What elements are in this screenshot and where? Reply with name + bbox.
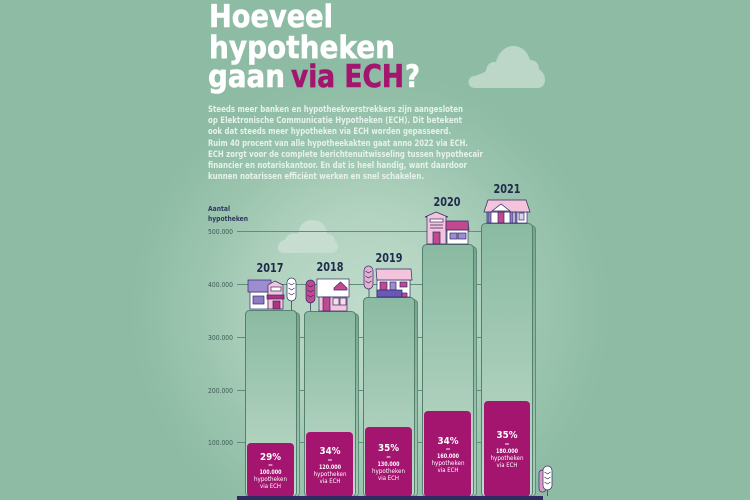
house 2019 (376, 269, 412, 297)
house 2020 (425, 212, 469, 244)
cloud top right (468, 46, 545, 88)
bar 2017 (246, 310, 300, 497)
baseline (237, 496, 543, 500)
bar 2019: 130.000 (378, 461, 400, 468)
title: Hoeveel (209, 0, 333, 35)
bar 2019: hypotheken (372, 468, 405, 475)
title: hypotheken (209, 30, 395, 66)
bar 2019 (364, 298, 418, 497)
intro text: Ruim 40 procent van alle hypotheekakten gaat anno 2022 via ECH. (208, 139, 468, 149)
intro text: kunnen notarissen efficiënt werken en snel schakelen. (208, 172, 424, 182)
intro text: financier en notariskantoor. En dat is heel handig, want daardoor (208, 161, 468, 171)
bar 2017: = (268, 462, 273, 469)
bar 2020: hypotheken (432, 460, 465, 467)
intro text: ook dat steeds meer hypotheken via ECH worden gepasseerd. (208, 127, 451, 137)
bar 2021: 35% (496, 430, 518, 441)
bar 2019: = (386, 454, 391, 461)
bar 2018: via ECH (320, 478, 340, 485)
bar 2017: via ECH (260, 483, 281, 490)
year labels: 2018 (316, 260, 344, 274)
bar 2017: hypotheken (254, 476, 287, 483)
tree 2019 (364, 266, 373, 297)
y axis labels: 200.000 (208, 387, 233, 395)
bar 2018 (304, 312, 358, 497)
house 2018 (317, 279, 349, 311)
year labels: 2020 (434, 195, 460, 209)
title: via ECH (291, 59, 404, 95)
y axis labels: 100.000 (208, 439, 233, 447)
y axis labels: 500.000 (208, 228, 233, 236)
bar 2020: = (445, 446, 451, 453)
bar 2021: = (504, 441, 510, 448)
year labels: 2021 (494, 182, 520, 196)
tree bottom right (539, 466, 552, 496)
tree 2017 (287, 278, 296, 310)
intro text: Steeds meer banken en hypotheekverstrekkers zijn aangesloten (208, 105, 463, 115)
title: ? (405, 59, 420, 95)
bar 2018: = (327, 457, 333, 464)
intro text: ECH zorgt voor de complete berichtenuitwisseling tussen hypothecair (208, 150, 484, 160)
bar 2020: 160.000 (437, 453, 459, 460)
bar 2021: hypotheken (490, 455, 524, 462)
house 2021 (484, 200, 530, 223)
bar 2020 (422, 244, 476, 497)
bar 2018: 34% (320, 446, 340, 457)
bar 2019: 35% (378, 443, 399, 454)
bar 2018: hypotheken (314, 471, 347, 478)
bar 2021: 180.000 (496, 448, 518, 455)
bar 2018: 120.000 (319, 464, 341, 471)
year labels: 2017 (256, 261, 284, 275)
bar 2020: via ECH (438, 467, 458, 474)
axis title (208, 205, 248, 223)
bar 2021: via ECH (496, 462, 518, 469)
bar 2017: 29% (260, 452, 281, 463)
y axis labels: 400.000 (208, 281, 233, 289)
y axis labels (208, 228, 233, 447)
bar 2020: 34% (438, 436, 458, 447)
title (208, 0, 420, 95)
year labels: 2019 (376, 251, 402, 265)
axis title: hypotheken (208, 215, 248, 223)
house 2017 (248, 280, 284, 309)
bar 2019: via ECH (378, 475, 399, 482)
intro text (208, 105, 484, 182)
intro text: op Elektronische Communicatie Hypotheken (ECH). Dit betekent (208, 116, 462, 126)
title: gaan (208, 59, 285, 95)
tree 2018 (306, 280, 315, 311)
cloud behind chart (278, 220, 338, 253)
bar 2021 (482, 224, 536, 497)
y axis labels: 300.000 (208, 334, 233, 342)
axis title: Aantal (208, 205, 230, 213)
bar 2017: 100.000 (260, 469, 282, 476)
year labels (256, 182, 520, 275)
